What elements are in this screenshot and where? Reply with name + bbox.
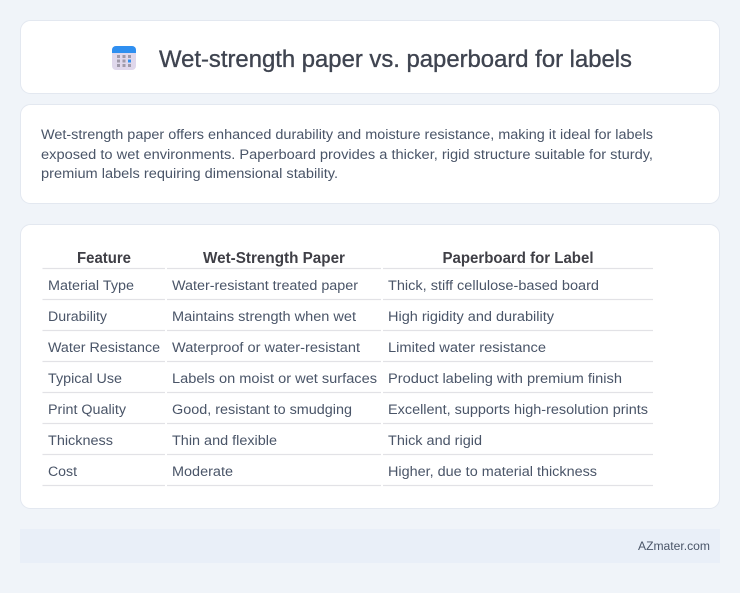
panel: comparison table [20,224,720,508]
footer bar [20,529,720,563]
table header: Feature [77,250,131,267]
row: durability: Durability [48,309,108,325]
title: Wet-strength paper vs. paperboard for labels [159,46,632,73]
intro paragraph: exposed to wet environments. Paperboard provides a thicker, rigid structure suitable for sturdy, [41,147,653,163]
panel: intro text [20,104,720,204]
row: durability: Maintains strength when wet [172,309,356,325]
header panel [20,20,720,94]
row: typical use: Labels on moist or wet surfaces [172,371,377,387]
row: thickness [48,433,482,449]
row: print quality: Good, resistant to smudging [172,402,352,418]
row: print quality [48,402,648,418]
row: material type: Material Type [48,278,134,294]
row: material type [48,278,599,294]
row: typical use: Typical Use [48,371,122,387]
row: print quality: Print Quality [48,402,127,418]
row: water resistance: Limited water resistance [388,340,546,356]
row: water resistance: Water Resistance [48,340,160,356]
icon: calendar [112,46,136,70]
row: water resistance [48,340,546,356]
row: material type: Water-resistant treated paper [172,278,358,294]
intro paragraph [41,127,653,182]
row: durability [48,309,555,325]
table header [77,250,594,267]
row: cost: Cost [48,464,77,480]
row: durability: High rigidity and durability [388,309,555,325]
row: print quality: Excellent, supports high-resolution prints [388,402,648,418]
table header: Wet-Strength Paper [203,250,345,267]
row: water resistance: Waterproof or water-resistant [172,340,360,356]
row: thickness: Thick and rigid [388,433,482,449]
row: typical use [48,371,622,387]
row: cost [48,464,597,480]
row: material type: Thick, stiff cellulose-based board [388,278,599,294]
table header: Paperboard for Label [442,250,594,267]
row: thickness: Thin and flexible [172,433,277,449]
footer brand text: AZmater.com [638,539,710,553]
row: cost: Moderate [172,464,233,480]
row: typical use: Product labeling with premium finish [388,371,622,387]
row: thickness: Thickness [48,433,113,449]
intro paragraph: premium labels requiring dimensional stability. [41,166,338,182]
intro paragraph: Wet-strength paper offers enhanced durability and moisture resistance, making it ideal for labels [41,127,653,143]
row: cost: Higher, due to material thickness [388,464,597,480]
